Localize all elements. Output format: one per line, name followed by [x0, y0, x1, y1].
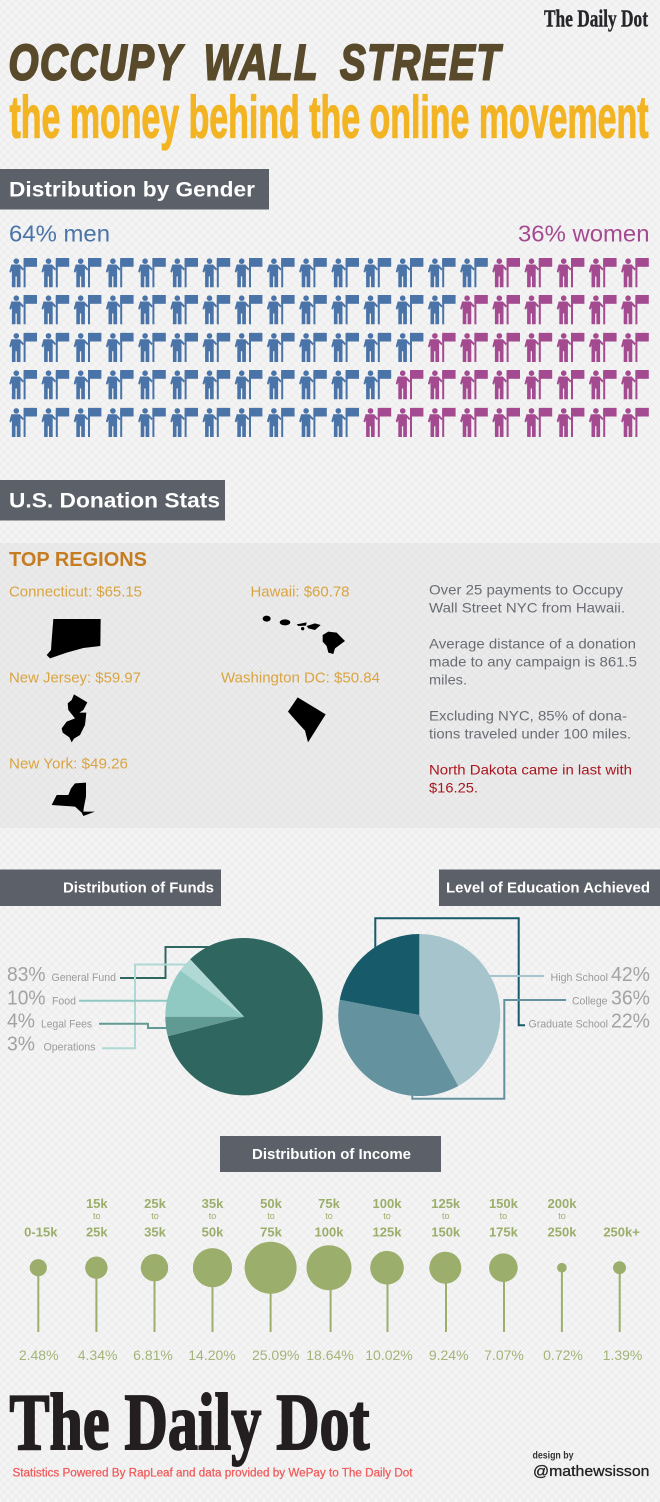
leader lines: [79, 947, 210, 1048]
legend: high school: [550, 964, 650, 986]
label: 64% men: 64% men: [9, 220, 110, 246]
bracket 75k-100k: to: [325, 1211, 333, 1221]
bracket 15k-25k: 15k: [86, 1196, 108, 1211]
bracket 75k-100k: 100k: [315, 1225, 344, 1240]
label: Hawaii: Hawaii: $60.78: [250, 584, 350, 601]
legend: legal fees: 4%: [7, 1010, 35, 1032]
bracket 125k-150k: 9.24%: [429, 1347, 469, 1363]
legend: college: College: [572, 996, 608, 1008]
label: 36% women: 36% women: [518, 220, 650, 246]
label: New Jersey: New Jersey: $59.97: [9, 670, 141, 687]
text block: North Dakota: North Dakota came in last with: [429, 761, 632, 777]
bracket 50k-75k: 75k: [260, 1225, 283, 1240]
label: Washington DC: Washington DC: $50.84: [221, 670, 380, 687]
title: Occupy Wall Street: OCCUPY WALL STREET: [8, 34, 503, 90]
pictogram row 3: [9, 333, 649, 362]
bracket 150k-175k: 150k: [489, 1196, 519, 1211]
bracket 200k-250k: to: [558, 1211, 566, 1221]
bracket 0-15k: 2.48%: [19, 1347, 59, 1363]
pie slices: [165, 938, 323, 1095]
heading: Level of Education Achieved: [439, 870, 660, 906]
logo: The Daily Dot masthead footer: The Daily Dot: [10, 1379, 370, 1467]
label: Connecticut: Connecticut: $65.15: [9, 584, 142, 601]
icon: Connecticut map: [47, 619, 101, 658]
legend: general fund: 83%: [7, 964, 46, 986]
heading: U.S. Donation Stats: U.S. Donation Stats: [9, 488, 220, 512]
bracket 25k-35k: 6.81%: [133, 1347, 173, 1363]
bracket 50k-75k: to: [267, 1211, 275, 1221]
bracket 125k-150k: [429, 1196, 469, 1363]
legend: general fund: General Fund: [52, 972, 116, 984]
chart: level of education pie: [338, 918, 650, 1099]
bracket 15k-25k: [78, 1196, 117, 1363]
bracket 50k-75k: 25.09%: [252, 1347, 299, 1363]
bracket 75k-100k: 18.64%: [306, 1347, 354, 1363]
text block: excluding NYC: tions traveled under 100 miles.: [429, 725, 631, 741]
bracket 0-15k: [19, 1225, 59, 1363]
bracket 250k+: 1.39%: [603, 1347, 642, 1363]
bracket 125k-150k: to: [442, 1211, 449, 1221]
bracket 35k-50k: [188, 1196, 236, 1363]
legend: general fund: [7, 964, 116, 986]
heading: Distribution by Gender: Distribution by Gender: [9, 178, 256, 202]
bracket 200k-250k: [543, 1196, 583, 1363]
bracket 150k-175k: 175k: [489, 1225, 519, 1240]
legend: operations: Operations: [44, 1042, 96, 1054]
bracket 100k-125k: 100k: [373, 1196, 402, 1211]
bracket 150k-175k: [484, 1196, 524, 1363]
credit: design by: design by: [532, 1451, 574, 1462]
bracket 150k-175k: 7.07%: [484, 1347, 524, 1363]
bracket 35k-50k: 50k: [202, 1225, 224, 1240]
bracket 0-15k: 0-15k: [24, 1225, 58, 1240]
credit: designer handle: @mathewsisson: [533, 1463, 650, 1480]
legend: food: 10%: [7, 988, 46, 1010]
bracket 25k-35k: [133, 1196, 173, 1363]
icon: Washington DC map: [288, 697, 326, 742]
pictogram row 1: [9, 258, 649, 287]
heading: Distribution by Gender: [0, 169, 269, 210]
heading: Distribution of Funds: [0, 870, 221, 906]
bracket 100k-125k: 10.02%: [365, 1347, 413, 1363]
bracket 15k-25k: to: [93, 1211, 101, 1221]
legend: operations: [7, 1034, 96, 1056]
bracket 35k-50k: 14.20%: [188, 1347, 236, 1363]
heading: Level of Education Achieved: Level of Education Achieved: [446, 880, 650, 896]
bracket 250k+: [603, 1225, 642, 1363]
bracket 100k-125k: to: [383, 1211, 391, 1221]
text block: Hawaii payments: Over 25 payments to Occupy: [429, 581, 623, 597]
bracket 75k-100k: [306, 1196, 354, 1363]
bracket 35k-50k: to: [209, 1211, 216, 1221]
pictogram row 4: [9, 370, 649, 399]
legend: food: Food: [52, 996, 76, 1008]
bracket 100k-125k: [365, 1196, 413, 1363]
legend: operations: 3%: [7, 1034, 35, 1056]
legend: graduate school: [528, 1010, 650, 1032]
icon: New York map: [52, 783, 95, 816]
legend: college: 36%: [611, 988, 650, 1010]
bracket 200k-250k: 250k: [548, 1225, 577, 1240]
legend: graduate school: 22%: [611, 1010, 650, 1032]
bracket 125k-150k: 125k: [431, 1196, 461, 1211]
text block: average distance: Average distance of a donation: [429, 635, 636, 651]
chart: distribution of funds pie: [7, 938, 323, 1095]
text block: average distance: miles.: [429, 671, 467, 687]
heading: Distribution of Income: [220, 1136, 441, 1172]
bracket 15k-25k: 4.34%: [78, 1347, 117, 1363]
heading: Distribution of Funds: Distribution of Funds: [63, 880, 214, 896]
pictogram row 2: [9, 295, 649, 324]
legend: legal fees: Legal Fees: [41, 1018, 92, 1030]
source credit: Statistics Powered By RapLeaf and data provided by WePay to The Daily Dot: [12, 1468, 413, 1480]
bracket 15k-25k: 25k: [86, 1225, 108, 1240]
icon: New Jersey map: [62, 694, 87, 742]
bracket 100k-125k: 125k: [373, 1225, 402, 1240]
legend: food: [7, 988, 76, 1010]
legend: high school: 42%: [611, 964, 650, 986]
bracket 25k-35k: 35k: [144, 1225, 167, 1240]
bracket 25k-35k: 25k: [144, 1196, 167, 1211]
heading: U.S. Donation Stats: [0, 480, 225, 520]
label: New York: New York: $49.26: [9, 756, 128, 773]
legend: legal fees: [7, 1010, 92, 1032]
text block: North Dakota: $16.25.: [429, 779, 478, 795]
legend: high school: High School: [550, 972, 608, 984]
bracket 35k-50k: 35k: [202, 1196, 224, 1211]
chart: distribution of income lollipops: [19, 1196, 642, 1363]
heading: Distribution of Income: Distribution of Income: [252, 1147, 411, 1163]
heading: Top Regions: TOP REGIONS: [9, 549, 147, 571]
bracket 75k-100k: 75k: [318, 1196, 341, 1211]
bracket 50k-75k: [245, 1196, 299, 1363]
legend: college: [572, 988, 650, 1010]
bracket 200k-250k: 0.72%: [543, 1347, 583, 1363]
bracket 50k-75k: 50k: [260, 1196, 283, 1211]
legend: graduate school: Graduate School: [528, 1018, 608, 1030]
text block: average distance: made to any campaign is 861.5: [429, 653, 637, 669]
icon: Hawaii map: [263, 616, 345, 654]
pictogram chart: gender split: [9, 258, 649, 437]
leader lines: [375, 918, 566, 1099]
text block: excluding NYC: Excluding NYC, 85% of dona-: [429, 707, 627, 723]
pie slices: [338, 934, 500, 1096]
bracket 25k-35k: to: [151, 1211, 159, 1221]
bracket 125k-150k: 150k: [431, 1225, 461, 1240]
bracket 250k+: 250k+: [603, 1225, 640, 1240]
bracket 150k-175k: to: [500, 1211, 507, 1221]
panel: top regions: [0, 543, 660, 828]
bracket 200k-250k: 200k: [548, 1196, 577, 1211]
text block: Hawaii payments: Wall Street NYC from Hawaii.: [429, 599, 625, 615]
pictogram row 5: [9, 408, 649, 437]
